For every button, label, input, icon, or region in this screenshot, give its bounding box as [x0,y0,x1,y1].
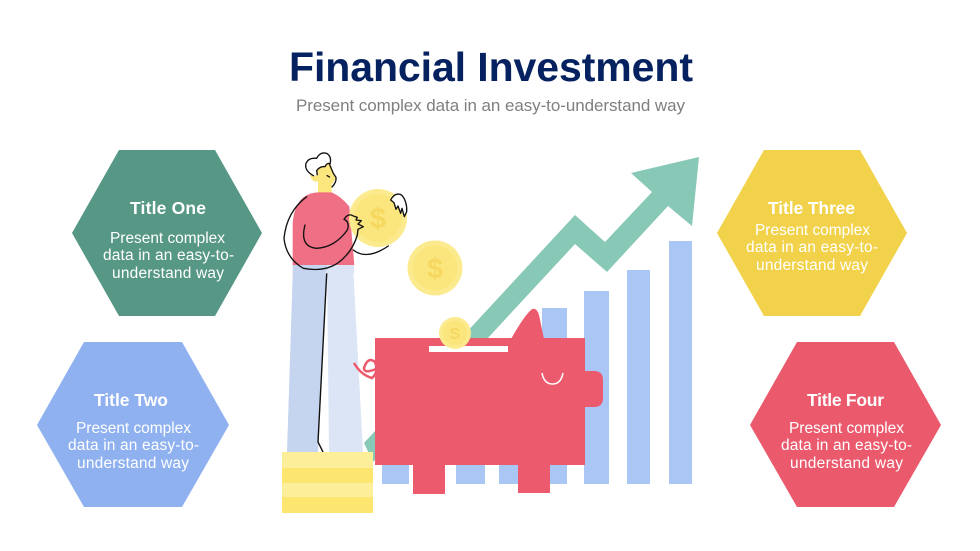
coin: falling [408,240,462,296]
text: title four body: data in an easy-to- [781,437,912,454]
pig eye [542,373,563,384]
hexagon: title one [72,150,262,316]
heading: title three: Title Three [768,198,855,218]
panel: title two [37,342,229,507]
subtitle: Present complex data in an easy-to-understand way [296,96,686,115]
hexagon: title four [750,342,941,507]
text: title two body [68,420,199,472]
title: Financial Investment [289,44,693,90]
coin: held [349,189,407,247]
coin: falling: $ [427,253,443,284]
panel: title three [717,150,907,316]
coin: entering slot: S [450,326,461,343]
bar chart [382,241,692,484]
heading: title two: Title Two [94,390,168,410]
heading: title four: Title Four [807,390,884,410]
heading: title one: Title One [130,198,206,218]
text: title three body: understand way [756,257,868,274]
panel: title one [72,150,262,316]
text: title four body: understand way [790,455,903,472]
text: title four body [781,420,912,472]
text: title one body: understand way [112,265,224,282]
piggy bank [354,309,603,494]
person arms and hands [284,194,407,269]
coin: held: $ [370,203,386,235]
text: title three body: Present complex [755,222,870,239]
pig tail [354,360,376,378]
hexagon: title two [37,342,229,507]
text: title one body: data in an easy-to- [103,247,234,264]
text: title two body: Present complex [76,420,191,437]
pig body [375,338,585,465]
text: title one body [103,230,234,282]
text: title three body: data in an easy-to- [746,239,878,256]
pig ear [511,309,544,339]
person legs [287,265,363,452]
text: title one body: Present complex [110,230,225,247]
person [282,153,373,513]
text: title two body: understand way [77,455,189,472]
text: title two body: data in an easy-to- [68,437,199,454]
illustration: investment scene [282,153,699,513]
panel: title four [750,342,941,507]
pig legs [413,460,550,494]
text: title four body: Present complex [789,420,904,437]
person upper body [293,153,354,273]
coin: entering slot [439,317,471,349]
pig snout [580,371,603,407]
hexagon: title three [717,150,907,316]
coin stack [282,452,373,513]
arrow: rising trend [364,157,699,462]
coin slot [429,346,508,352]
text: title three body [746,222,878,274]
